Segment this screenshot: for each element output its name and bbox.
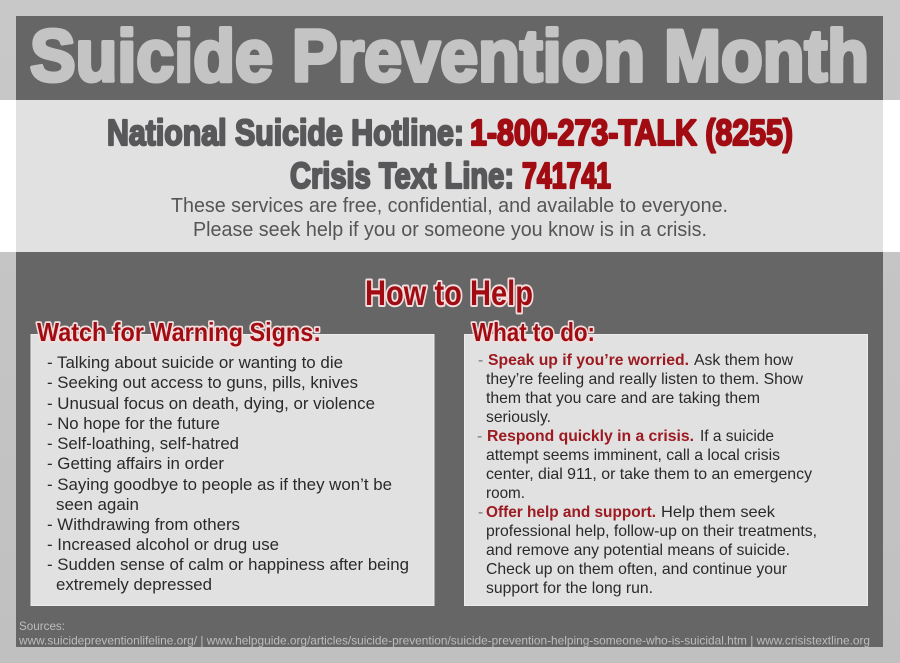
advice: respond quickly: Respond quickly in a crisis. xyxy=(487,428,694,445)
sources: Sources: xyxy=(19,619,65,633)
heading: watch for warning signs: Watch for Warning Signs: xyxy=(37,317,321,347)
advice: speak up: seriously. xyxy=(486,409,551,426)
warning signs list xyxy=(47,353,409,594)
advice: respond quickly: room. xyxy=(486,485,525,502)
advice: offer help: and remove any potential means of suicide. xyxy=(486,542,790,559)
advice: respond quickly: If a suicide xyxy=(700,428,774,445)
panel: what to do xyxy=(464,317,868,606)
hotline number xyxy=(107,112,793,153)
advice: respond quickly: - xyxy=(477,428,482,445)
panel: hotline information xyxy=(16,100,883,252)
warning signs list: - Talking about suicide or wanting to die xyxy=(47,353,343,372)
warning signs list: seen again xyxy=(56,495,139,514)
advice: speak up: them that you care and are taking them xyxy=(486,390,760,407)
warning signs list: - Increased alcohol or drug use xyxy=(47,535,279,554)
heading: what to do: What to do: xyxy=(472,317,595,347)
hotline number: 1-800-273-TALK (8255) xyxy=(470,112,793,153)
advice: speak up xyxy=(478,352,804,426)
hotline number: National Suicide Hotline: xyxy=(107,112,464,153)
title: Suicide Prevention Month xyxy=(30,16,869,97)
advice: offer help: support for the long run. xyxy=(486,580,653,597)
advice: respond quickly: center, dial 911, or take them to an emergency xyxy=(486,466,812,483)
services note: These services are free, confidential, and available to everyone. xyxy=(171,195,728,217)
panel: warning signs xyxy=(31,317,434,606)
advice: speak up: Speak up if you’re worried. xyxy=(488,352,689,369)
warning signs list: - Withdrawing from others xyxy=(47,515,240,534)
heading: how to help: How to Help xyxy=(365,274,533,313)
crisis text line: Crisis Text Line: xyxy=(290,155,514,196)
services note xyxy=(171,195,728,241)
advice: speak up: they’re feeling and really listen to them. Show xyxy=(486,371,804,388)
advice: speak up: - xyxy=(478,352,483,369)
advice: respond quickly xyxy=(477,428,812,502)
warning signs list: - Unusual focus on death, dying, or violence xyxy=(47,394,375,413)
sources xyxy=(18,619,870,648)
advice: offer help: professional help, follow-up on their treatments, xyxy=(486,523,817,540)
services note: Please seek help if you or someone you know is in a crisis. xyxy=(193,219,707,241)
advice: offer help xyxy=(478,504,817,597)
advice: offer help: Check up on them often, and continue your xyxy=(486,561,787,578)
advice: respond quickly: attempt seems imminent, call a local crisis xyxy=(486,447,780,464)
advice: speak up: Ask them how xyxy=(694,352,794,369)
warning signs list: - No hope for the future xyxy=(47,414,220,433)
warning signs list: - Saying goodbye to people as if they won’t be xyxy=(47,475,392,494)
sources: www.suicidepreventionlifeline.org/ | www.helpguide.org/articles/suicide-prevention/suicide-prevention-helping-someone-who-is-suicidal.htm | www.crisistextline.org xyxy=(18,634,870,648)
advice: offer help: Offer help and support. xyxy=(486,504,656,521)
advice: offer help: - xyxy=(478,504,483,521)
warning signs list: - Sudden sense of calm or happiness after being xyxy=(47,555,409,574)
advice: offer help: Help them seek xyxy=(661,504,775,521)
crisis text line: 741741 xyxy=(522,155,611,196)
warning signs list: - Self-loathing, self-hatred xyxy=(47,434,239,453)
warning signs list: extremely depressed xyxy=(56,575,212,594)
warning signs list: - Getting affairs in order xyxy=(47,454,224,473)
warning signs list: - Seeking out access to guns, pills, knives xyxy=(47,373,358,392)
band: white hotline strip xyxy=(0,100,900,252)
